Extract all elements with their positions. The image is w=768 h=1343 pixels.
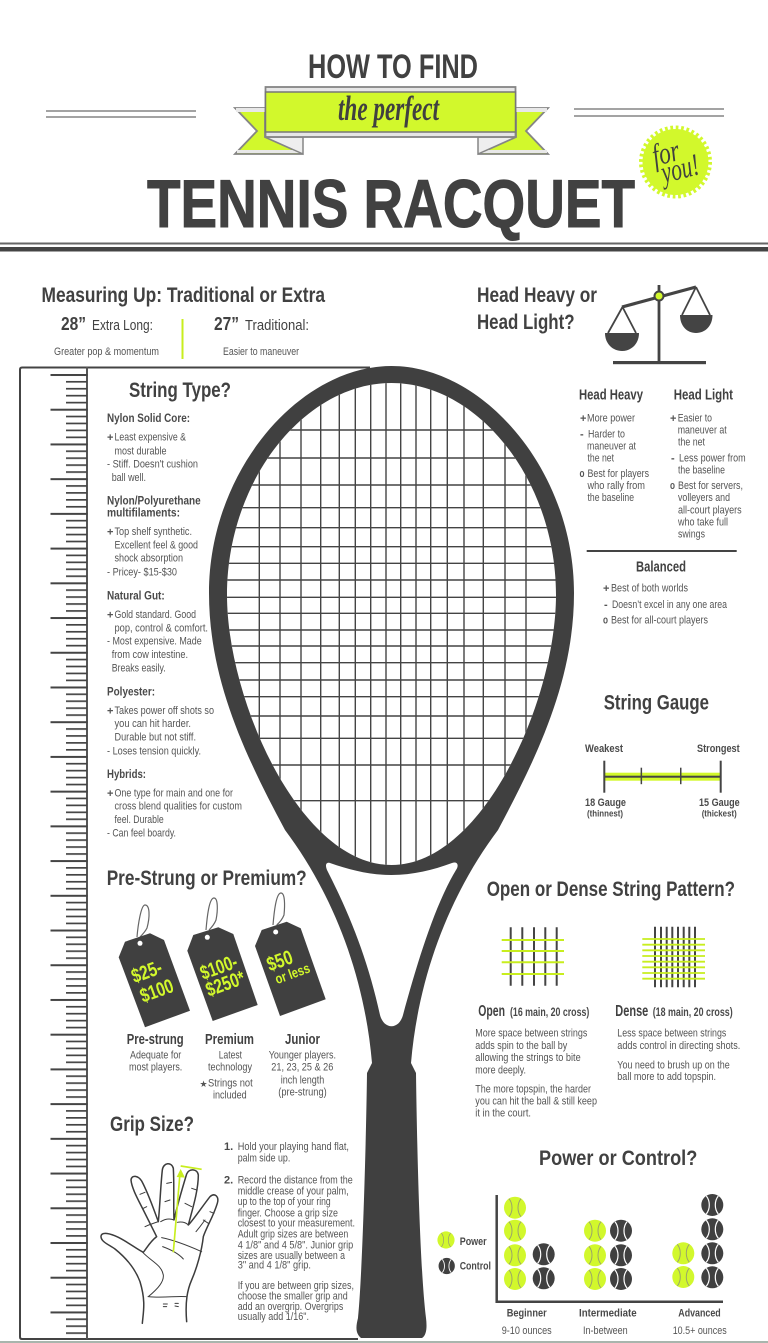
dense text: Less space between strings — [617, 1028, 727, 1040]
natural gut — [107, 588, 208, 675]
balanced block: + — [603, 583, 609, 595]
head heavy column: Head Heavy — [579, 386, 643, 403]
head light column: maneuver at — [678, 425, 727, 437]
diagram: open pattern — [502, 927, 564, 986]
balanced block — [603, 558, 728, 626]
premium text: Latest — [219, 1049, 242, 1061]
head heavy column: the net — [588, 453, 614, 465]
grip step 2: closest to your measurement. — [238, 1218, 355, 1230]
extra long label: Extra Long: — [92, 318, 153, 334]
grip step 1 — [224, 1141, 349, 1165]
head light column: swings — [678, 528, 705, 540]
head heavy column: the baseline — [588, 492, 634, 504]
heading: head heavy or head light — [477, 284, 597, 334]
junior text: (pre-strung) — [278, 1087, 327, 1099]
nylon solid core: + — [107, 432, 113, 444]
nylon polyurethane multifilaments: Excellent feel & good — [114, 539, 198, 551]
grip step 2: up to the top of your ring — [238, 1196, 331, 1208]
price tag: junior — [255, 893, 326, 1016]
grip step 2: 2. — [224, 1174, 233, 1186]
head light column: + — [670, 413, 676, 425]
racquet strings — [220, 380, 560, 870]
chart axes — [497, 1195, 723, 1302]
head heavy column: + — [580, 413, 586, 425]
balanced block: o — [603, 614, 608, 626]
grip step 2: 4 1/8" and 4 5/8". Junior grip — [238, 1239, 353, 1251]
header rules — [0, 242, 768, 252]
head light column: Less power from — [679, 453, 746, 465]
head heavy column: maneuver at — [587, 440, 636, 452]
panel: pre-strung or premium — [107, 867, 336, 1101]
panel: string gauge — [585, 691, 740, 820]
head light column: all-court players — [678, 504, 742, 516]
panel: open or dense string pattern — [475, 878, 740, 1120]
banner: the perfect — [235, 87, 548, 154]
advanced balls — [672, 1194, 723, 1288]
legend: power — [437, 1231, 487, 1249]
junior text: Junior — [285, 1032, 320, 1048]
polyester: Polyester: — [107, 684, 155, 698]
badge text you: you! — [655, 147, 703, 190]
label 15 gauge: (thickest) — [702, 809, 737, 820]
polyester: + — [107, 706, 113, 718]
intermediate label: In-between — [583, 1325, 628, 1337]
head light column: the net — [678, 437, 705, 449]
label 18 gauge — [585, 797, 626, 820]
pre-strung text: most players. — [129, 1062, 182, 1074]
natural gut: from cow intestine. — [112, 649, 188, 661]
open text: The more topspin, the harder — [475, 1083, 591, 1095]
beginner label: 9-10 ounces — [502, 1325, 552, 1337]
balanced block: Doesn’t excel in any one area — [612, 599, 728, 611]
nylon solid core: most durable — [114, 445, 166, 457]
junior text: Younger players. — [269, 1049, 336, 1061]
label 15 gauge: 15 Gauge — [699, 797, 740, 809]
decorative side lines right — [574, 108, 724, 117]
nylon polyurethane multifilaments: Nylon/Polyurethane — [107, 493, 201, 507]
label strongest: Strongest — [697, 743, 740, 755]
legend: control: Control — [460, 1260, 491, 1272]
polyester: - Loses tension quickly. — [107, 745, 201, 757]
heading: grip size: Grip Size? — [110, 1113, 194, 1136]
grip step 2: Record the distance from the — [238, 1174, 353, 1186]
intermediate balls — [584, 1220, 632, 1290]
polyester: Durable but not stiff. — [114, 732, 196, 744]
panel: power or control — [437, 1147, 727, 1337]
section divider — [587, 550, 737, 552]
junior text — [269, 1032, 336, 1099]
dense text: ball more to add topspin. — [617, 1071, 716, 1083]
nylon polyurethane multifilaments: - Pricey- $15-$30 — [107, 567, 177, 579]
grip step 1: Hold your playing hand flat, — [238, 1141, 349, 1153]
nylon polyurethane multifilaments — [107, 493, 201, 579]
balanced block: - — [604, 599, 608, 611]
intermediate label — [579, 1308, 637, 1337]
open text: (16 main, 20 cross) — [510, 1007, 589, 1019]
open text: More space between strings — [475, 1028, 588, 1040]
premium text: Strings not — [208, 1078, 253, 1090]
extra long description: Greater pop & momentum — [54, 346, 159, 358]
icon: balance scale — [605, 285, 712, 364]
nylon polyurethane multifilaments: shock absorption — [114, 553, 183, 565]
lime divider — [182, 319, 184, 359]
panel: measuring up — [42, 284, 325, 359]
head light column: the baseline — [678, 465, 725, 477]
panel: head heavy vs head light — [579, 386, 746, 626]
balanced block: Balanced — [636, 558, 686, 575]
title: tennis racquet: TENNIS RACQUET — [147, 166, 635, 242]
hybrids: Hybrids: — [107, 767, 146, 781]
dense text: adds control in directing shots. — [617, 1040, 740, 1052]
price tag: premium — [187, 898, 258, 1021]
intermediate label: Intermediate — [579, 1308, 637, 1320]
head light column — [670, 386, 746, 540]
ruler frame — [20, 367, 370, 1339]
beginner balls — [504, 1197, 555, 1290]
decorative side lines left — [46, 110, 196, 118]
polyester: Takes power off shots so — [114, 705, 214, 717]
balanced block: Best for all-court players — [611, 614, 708, 626]
grip between sizes note: choose the smaller grip and — [238, 1291, 348, 1303]
hybrids: feel. Durable — [114, 814, 164, 826]
heading: head heavy or head light: Head Light? — [477, 311, 574, 334]
nylon polyurethane multifilaments: + — [107, 526, 113, 538]
price tag: pre-strung — [119, 905, 190, 1027]
label 15 gauge — [699, 797, 740, 820]
premium text — [200, 1032, 254, 1101]
open text: you can hit the ball & still keep — [475, 1095, 597, 1107]
hybrids — [107, 767, 242, 840]
racquet frame and handle — [209, 366, 574, 1338]
head heavy column: Best for players — [588, 468, 649, 480]
heading: head heavy or head light: Head Heavy or — [477, 284, 597, 307]
hybrids: cross blend qualities for custom — [114, 800, 242, 812]
polyester: you can hit harder. — [114, 718, 191, 730]
natural gut: Breaks easily. — [112, 663, 166, 675]
grip step 1: palm side up. — [238, 1153, 290, 1165]
head light column: Easier to — [678, 413, 712, 425]
heading: string type: String Type? — [129, 379, 231, 402]
grip between sizes note: usually add 1/16". — [238, 1311, 309, 1323]
hybrids: One type for main and one for — [114, 787, 233, 799]
grip step 2: Adult grip sizes are between — [238, 1229, 348, 1241]
27 inch size: 27” — [214, 314, 239, 334]
price tag: pre-strung: $100 — [137, 975, 177, 1008]
28 inch size: 28” — [61, 314, 86, 334]
diagram: dense pattern — [642, 927, 705, 987]
legend: control — [439, 1258, 491, 1274]
grip step 1: 1. — [224, 1141, 233, 1153]
grip step 2: finger. Choose a grip size — [238, 1207, 338, 1219]
polyester — [107, 684, 214, 757]
head heavy column: More power — [587, 413, 635, 425]
icon: hand with measure arrow — [101, 1164, 218, 1323]
open text: allowing the strings to bite — [475, 1052, 581, 1064]
open text: more deeply. — [475, 1064, 526, 1076]
nylon solid core: Nylon Solid Core: — [107, 411, 190, 425]
panel: string type — [107, 379, 242, 840]
legend: power: Power — [460, 1236, 487, 1248]
racquet — [209, 366, 574, 1338]
head light column: o — [670, 480, 675, 492]
pre-strung text: Adequate for — [130, 1049, 182, 1061]
title: how to find: HOW TO FIND — [308, 48, 478, 86]
head light column: volleyers and — [678, 492, 730, 504]
price tag: junior: $50 — [264, 947, 296, 976]
price tag: pre-strung: $25- — [129, 957, 165, 988]
open text: Open — [478, 1003, 505, 1020]
grip between sizes note: add an overgrip. Overgrips — [238, 1301, 344, 1313]
head light column: Head Light — [674, 386, 733, 403]
heading: power or control: Power or Control? — [539, 1147, 697, 1170]
badge: for you — [642, 128, 710, 196]
panel: grip size — [101, 1113, 355, 1323]
dense text: Dense — [615, 1003, 648, 1020]
price tag: junior: or less — [273, 960, 312, 987]
head heavy column — [579, 386, 649, 504]
natural gut: Gold standard. Good — [114, 609, 196, 621]
head heavy column: who rally from — [587, 480, 645, 492]
premium text: technology — [208, 1062, 252, 1074]
open text — [475, 1003, 597, 1120]
nylon solid core: ball well. — [112, 472, 146, 484]
junior text: inch length — [281, 1074, 324, 1086]
head heavy column: - — [580, 428, 584, 440]
bottom edge strip — [0, 1341, 768, 1343]
head light column: - — [671, 453, 675, 465]
heading: string gauge: String Gauge — [604, 691, 709, 714]
hybrids: + — [107, 788, 113, 800]
premium text: ★ — [200, 1080, 208, 1090]
ruler ticks — [50, 372, 88, 1338]
open text: it in the court. — [475, 1108, 531, 1120]
heading: measuring up: Measuring Up: Traditional or Extra — [42, 284, 325, 307]
premium text: included — [213, 1089, 247, 1101]
advanced label: Advanced — [678, 1308, 721, 1320]
junior text: 21, 23, 25 & 26 — [271, 1062, 333, 1074]
label 18 gauge: (thinnest) — [587, 809, 623, 820]
nylon solid core — [107, 411, 198, 484]
price tag: premium: $250* — [203, 967, 248, 1002]
advanced label: 10.5+ ounces — [673, 1325, 727, 1337]
dense text: You need to brush up on the — [617, 1059, 730, 1071]
natural gut: pop, control & comfort. — [114, 623, 208, 635]
head light column: Best for servers, — [678, 480, 743, 492]
price tag: premium: $100- — [197, 951, 241, 985]
natural gut: Natural Gut: — [107, 588, 165, 602]
heading: pre-strung or premium: Pre-Strung or Premium? — [107, 867, 307, 890]
head light column: who take full — [677, 516, 728, 528]
nylon solid core: Least expensive & — [114, 432, 187, 444]
label 18 gauge: 18 Gauge — [585, 797, 626, 809]
nylon solid core: - Stiff. Doesn't cushion — [107, 458, 198, 470]
beginner label: Beginner — [507, 1308, 547, 1320]
balanced block: Best of both worlds — [611, 583, 688, 595]
grip between sizes note — [238, 1280, 354, 1323]
head heavy column: o — [580, 468, 585, 480]
pre-strung text: Pre-strung — [127, 1032, 184, 1048]
grip between sizes note: If you are between grip sizes, — [238, 1280, 354, 1292]
pre-strung text — [127, 1032, 184, 1074]
dense text — [615, 1003, 740, 1083]
dense text: (18 main, 20 cross) — [653, 1007, 733, 1019]
badge text for: for — [648, 132, 684, 173]
natural gut: + — [107, 610, 113, 622]
nylon polyurethane multifilaments: multifilaments: — [107, 506, 180, 520]
grip step 2: sizes are usually between a — [238, 1250, 346, 1262]
hybrids: - Can feel boardy. — [107, 828, 176, 840]
premium text: Premium — [205, 1032, 254, 1048]
traditional description: Easier to maneuver — [223, 346, 299, 358]
gauge scale — [603, 761, 722, 793]
open text: adds spin to the ball by — [475, 1040, 568, 1052]
grip step 2: middle crease of your palm, — [238, 1185, 349, 1197]
banner text: the perfect — [338, 89, 440, 128]
nylon polyurethane multifilaments: Top shelf synthetic. — [114, 526, 192, 538]
beginner label — [502, 1308, 552, 1337]
grip step 2: 3" and 4 1/8" grip. — [238, 1259, 311, 1271]
label weakest: Weakest — [585, 743, 623, 755]
lime measure arrow — [173, 1166, 202, 1252]
natural gut: - Most expensive. Made — [107, 636, 202, 648]
traditional label: Traditional: — [245, 318, 309, 334]
grip step 2 — [224, 1174, 355, 1271]
head heavy column: Harder to — [588, 428, 625, 440]
advanced label — [673, 1308, 727, 1337]
